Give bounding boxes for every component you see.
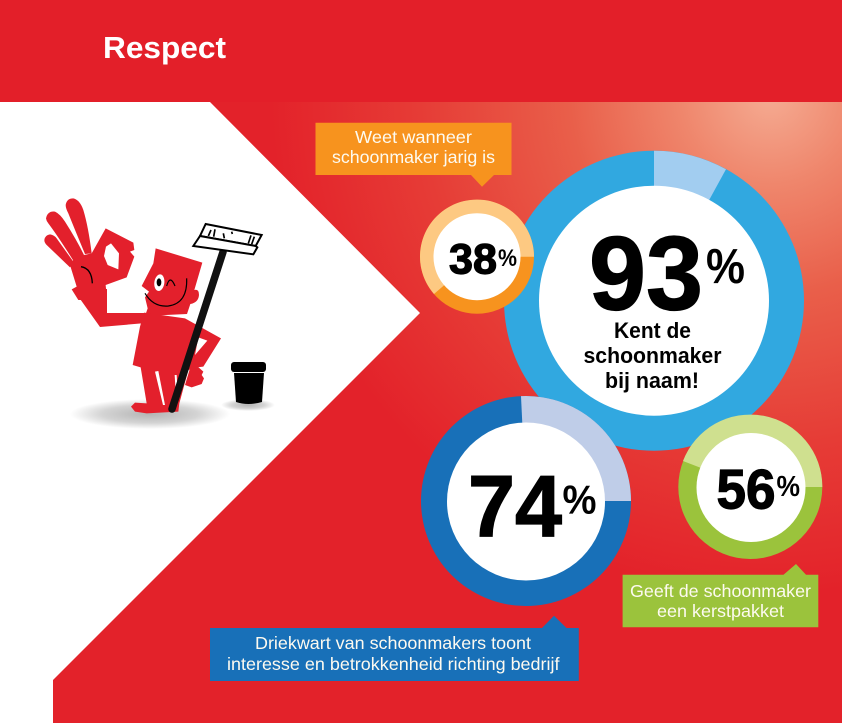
callout: blue label: interesse en betrokkenheid richting bedrijf xyxy=(227,654,560,674)
panel: white arrow shape xyxy=(0,102,420,723)
value: 56%: 56 xyxy=(716,458,776,520)
bucket shadow xyxy=(221,399,275,411)
caption: kent de schoonmaker bij naam xyxy=(584,318,722,393)
icon: arm xyxy=(73,289,146,327)
header band xyxy=(0,0,842,102)
value: 93%: 93 xyxy=(589,216,703,332)
caption: kent de schoonmaker bij naam: Kent de xyxy=(614,318,691,343)
chart: donut 38% xyxy=(420,200,534,314)
callout: green label: Geeft de schoonmaker xyxy=(630,581,811,601)
illustration: cleaner giving OK sign xyxy=(44,198,275,429)
callout: blue label xyxy=(210,616,579,681)
value: 38%: 38 xyxy=(449,236,497,284)
callout: green label: een kerstpakket xyxy=(657,601,784,621)
callout: green label xyxy=(623,564,818,627)
caption: kent de schoonmaker bij naam: schoonmaker xyxy=(584,343,722,368)
icon: bucket xyxy=(231,362,266,404)
title: Respect xyxy=(103,30,226,65)
callout: orange label xyxy=(316,123,512,187)
floor shadow xyxy=(70,399,230,429)
value: 74%: % xyxy=(562,476,596,522)
value: 38%: % xyxy=(498,245,517,272)
chart: donut 74% xyxy=(421,396,631,606)
caption: kent de schoonmaker bij naam: bij naam! xyxy=(605,368,699,393)
value: 93%: % xyxy=(706,240,745,294)
icon: head xyxy=(142,248,202,316)
icon: broom xyxy=(172,224,262,409)
icon: body and legs xyxy=(131,313,221,413)
icon: hand xyxy=(44,198,134,300)
callout: orange label: Weet wanneer xyxy=(355,127,472,147)
value: 56%: % xyxy=(776,471,800,503)
chart: donut 93% xyxy=(504,151,804,451)
value: 74%: 74 xyxy=(468,458,562,555)
chart: donut 56% xyxy=(678,415,822,559)
callout: orange label: schoonmaker jarig is xyxy=(332,147,495,167)
callout: blue label: Driekwart van schoonmakers toont xyxy=(255,633,531,653)
